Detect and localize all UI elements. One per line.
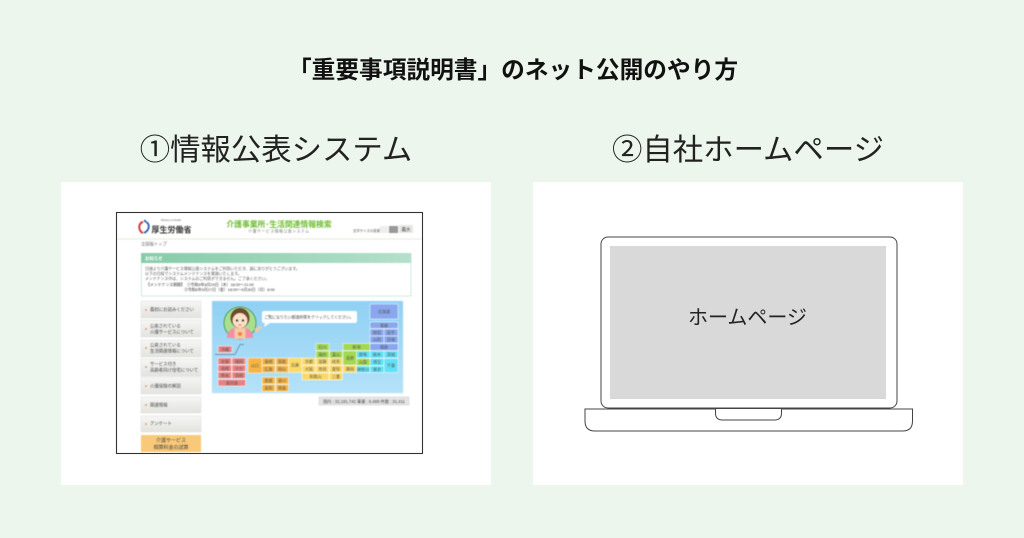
Kyushu and Okinawa: 長崎	[221, 365, 229, 371]
Kanto	[356, 351, 398, 372]
Chugoku and Shikoku: 広島	[264, 366, 272, 372]
Chugoku and Shikoku: 鳥取	[278, 358, 286, 364]
Kanto: 東京	[373, 366, 381, 372]
text size buttons	[353, 225, 413, 233]
laptop screen	[610, 246, 886, 399]
laptop lid	[601, 237, 897, 408]
Kansai and Tokai: 奈良	[318, 366, 326, 372]
prefecture map	[215, 304, 398, 392]
icon: laptop	[585, 237, 912, 431]
side menu: 相算料金の試算	[153, 444, 189, 451]
notice panel: お知らせ	[145, 255, 163, 262]
notice panel: 以下の日程でシステムメンテナンスを実施いたします。	[145, 271, 242, 276]
Hokkaido and Tohoku: 福島	[380, 344, 388, 350]
laptop notch	[716, 409, 782, 420]
Hokkaido and Tohoku: 青森	[380, 322, 388, 328]
Kanto: 群馬	[359, 351, 367, 357]
side menu: 高齢者向け住宅について	[150, 366, 198, 374]
site logo: Ministry of Health	[161, 218, 182, 222]
Hokuriku and Koshinetsu: 富山	[332, 351, 340, 357]
visitor counter	[319, 397, 409, 405]
heading: information disclosure system: ①情報公表システム	[140, 133, 412, 167]
Kansai and Tokai: 京都	[305, 358, 313, 364]
Kansai and Tokai: 和歌山	[310, 373, 322, 379]
Kansai and Tokai: 三重	[332, 373, 340, 379]
screenshot content	[117, 218, 422, 452]
Kanto: 埼玉	[373, 358, 381, 364]
Kanto: 茨城	[387, 351, 395, 357]
Kansai and Tokai: 兵庫	[291, 362, 299, 368]
side menu: 最初にお読みください	[150, 306, 195, 313]
character illustration	[224, 307, 262, 339]
Kyushu and Okinawa: 熊本	[221, 372, 229, 378]
site title: 介護事業所･生活関連情報検索	[226, 219, 332, 229]
Hokuriku and Koshinetsu: 福井	[318, 351, 326, 357]
speech bubble	[262, 311, 357, 327]
Hokkaido and Tohoku: 岩手	[387, 329, 395, 335]
Kansai and Tokai: 静岡	[346, 366, 354, 372]
Kyushu and Okinawa: 宮崎	[235, 372, 243, 378]
side menu: アンケート	[150, 420, 172, 427]
notice panel: メンテナンス中は、システムのご利用ができません。ご了承ください。	[145, 276, 269, 281]
Hokuriku and Koshinetsu: 山梨	[359, 358, 367, 364]
side menu: サービス付き	[150, 360, 176, 368]
side menu: 関連情報	[150, 402, 168, 408]
side menu: 介護サービスについて	[150, 328, 194, 336]
site logo: 厚生労働省	[152, 224, 192, 234]
Hokkaido and Tohoku: 秋田	[373, 329, 381, 335]
title: 「重要事項説明書」のネット公開のやり方	[288, 57, 738, 84]
Chugoku and Shikoku: 愛媛	[264, 377, 272, 383]
site subtitle: 介護サービス情報公表システム	[248, 228, 310, 234]
notice panel: ②令和6年9月27日（金）18:00～9月30日（月）8:00	[184, 287, 276, 292]
breadcrumb: 全国版トップ	[141, 240, 167, 248]
panel: company homepage	[533, 182, 963, 485]
Hokuriku and Koshinetsu: 新潟	[352, 344, 360, 350]
Kansai and Tokai	[288, 358, 356, 380]
Chugoku and Shikoku: 島根	[264, 358, 272, 364]
Kanto: 神奈川	[357, 366, 369, 372]
Kansai and Tokai: 岐阜	[332, 358, 340, 364]
screen label: ホームページ	[688, 307, 807, 329]
heading: company homepage: ②自社ホームページ	[612, 133, 884, 167]
Kansai and Tokai: 大阪	[305, 366, 313, 372]
visitor counter: 国内 : 32,181,742 事業 : 6,489 件数 : 31,411	[323, 398, 406, 405]
side menu: 公表されている	[150, 322, 181, 330]
side menu: 介護サービス	[156, 437, 186, 444]
Hokkaido and Tohoku: 北海道	[378, 308, 390, 314]
text size buttons: 最大	[402, 226, 411, 233]
map area	[212, 301, 403, 393]
Chugoku and Shikoku: 高知	[264, 384, 272, 390]
Kanto: 千葉	[387, 362, 395, 368]
Kansai and Tokai: 愛知	[332, 366, 340, 372]
side menu: 介護保険の解説	[150, 382, 181, 390]
side menu: 生活関連情報について	[150, 348, 194, 354]
notice panel: 日頃より介護サービス情報公表システムをご利用いただき、誠にありがとうございます。	[145, 266, 300, 271]
Kyushu and Okinawa: 鹿児島	[226, 380, 238, 386]
Kanto: 栃木	[373, 351, 381, 357]
Chugoku and Shikoku	[248, 358, 288, 392]
Chugoku and Shikoku: 山口	[251, 362, 259, 368]
Kyushu and Okinawa: 沖縄	[221, 346, 229, 352]
Hokkaido and Tohoku	[370, 304, 398, 350]
Chugoku and Shikoku: 岡山	[278, 366, 286, 372]
Hokkaido and Tohoku: 宮城	[387, 336, 395, 342]
laptop base	[585, 409, 912, 431]
Kyushu and Okinawa: 佐賀	[221, 358, 229, 364]
Hokkaido and Tohoku: 山形	[373, 336, 381, 342]
Chugoku and Shikoku: 徳島	[278, 384, 286, 390]
text size buttons: 文字サイズの変更	[353, 228, 381, 233]
screenshot frame	[116, 212, 422, 454]
Kyushu and Okinawa	[218, 346, 246, 386]
side menu: 公表されている	[150, 342, 181, 348]
Kansai and Tokai: 滋賀	[318, 358, 326, 364]
Kyushu and Okinawa: 福岡	[235, 358, 243, 364]
Hokuriku and Koshinetsu: 長野	[346, 354, 354, 360]
Kyushu and Okinawa: 大分	[235, 365, 243, 371]
notice panel	[141, 253, 411, 296]
website screenshot	[116, 212, 422, 454]
site logo	[139, 218, 192, 234]
Hokuriku and Koshinetsu: 石川	[318, 344, 326, 350]
speech bubble: ご覧になりたい都道府県をクリックしてください。	[264, 314, 354, 320]
Chugoku and Shikoku: 香川	[278, 377, 286, 383]
notice panel: 【メンテナンス期間】 ①令和6年8月29日（木）18:00～21:00	[146, 282, 255, 287]
Hokuriku and Koshinetsu	[316, 344, 370, 366]
side menu	[141, 301, 201, 452]
panel: information disclosure system	[61, 182, 491, 485]
